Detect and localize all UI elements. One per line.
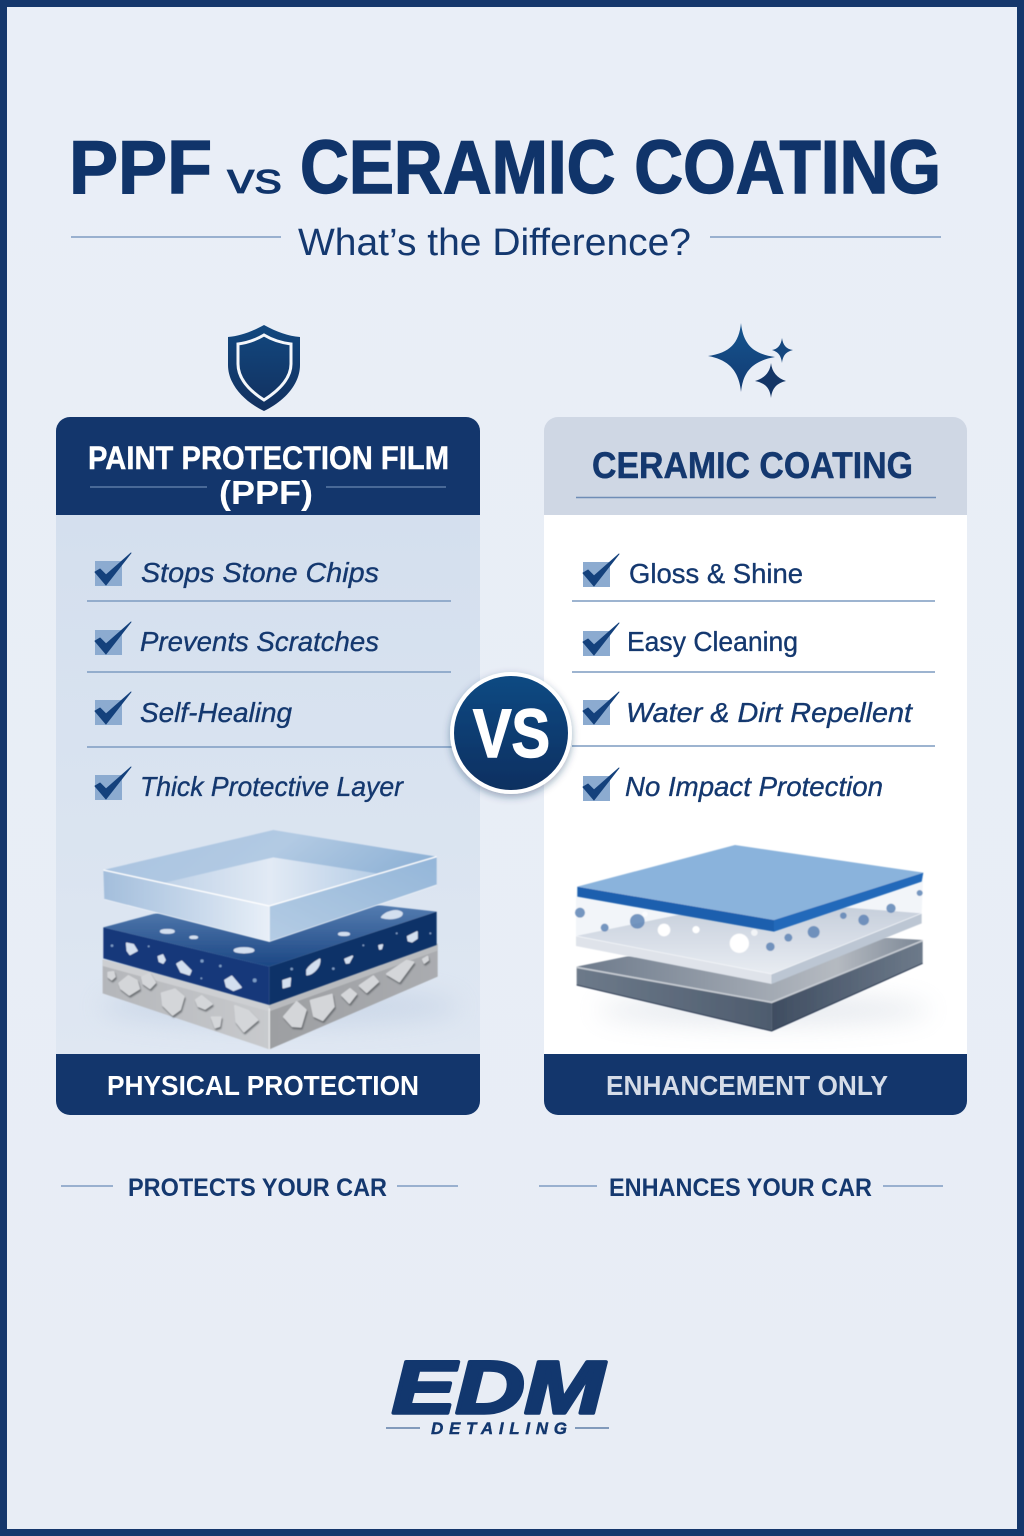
stone base layer	[103, 943, 438, 1049]
header title: PAINT PROTECTION FILM	[88, 440, 449, 476]
illustration: PPF layers	[100, 830, 460, 1049]
item: no impact protection: No Impact Protection	[625, 771, 883, 802]
item: thick protective layer: Thick Protective Layer	[140, 771, 405, 802]
panel body	[56, 515, 480, 1055]
caption: protects your car: PROTECTS YOUR CAR	[128, 1174, 387, 1202]
dividers: right list	[572, 601, 935, 746]
item: easy cleaning: Easy Cleaning	[627, 626, 798, 657]
transparent film layer	[103, 830, 437, 942]
panel: ceramic coating	[544, 417, 967, 1115]
title: CERAMIC COATING	[300, 125, 941, 209]
subtitle with rules: What’s the Difference?	[298, 222, 691, 264]
panel footer	[544, 1054, 967, 1115]
VS badge	[452, 674, 570, 792]
blue layer	[103, 893, 437, 1005]
dark paint base	[577, 930, 923, 1031]
logo: EDM Detailing	[386, 1346, 609, 1438]
item: self-healing: Self-Healing	[140, 697, 292, 728]
item: prevents scratches: Prevents Scratches	[140, 626, 379, 657]
item: water and dirt repellent: Water & Dirt Repellent	[626, 697, 913, 728]
caption: enhances your car: ENHANCES YOUR CAR	[609, 1174, 872, 1202]
panel footer	[56, 1054, 480, 1115]
blue coating layer	[577, 845, 923, 932]
list: ceramic coating features	[583, 554, 913, 802]
translucent bubble layer	[575, 873, 923, 984]
title	[69, 125, 941, 209]
logo: EDM Detailing: EDM	[392, 1346, 606, 1429]
dividers: left list	[87, 601, 460, 747]
list: PPF features	[95, 553, 405, 802]
illustration: ceramic layers	[575, 845, 930, 1031]
footer label: ENHANCEMENT ONLY	[606, 1070, 888, 1101]
header title: CERAMIC COATING	[592, 445, 913, 486]
icon: sparkles	[708, 323, 793, 398]
footer label: PHYSICAL PROTECTION	[107, 1070, 419, 1101]
panel header	[544, 417, 967, 515]
item: gloss and shine	[583, 554, 803, 589]
logo: EDM Detailing: DETAILING	[431, 1419, 567, 1438]
VS badge: VS	[473, 695, 550, 772]
item: self-healing	[95, 692, 292, 728]
panel: paint protection film	[56, 417, 480, 1115]
item: stops stone chips: Stops Stone Chips	[141, 557, 379, 588]
panel body	[544, 515, 967, 1055]
panel header	[56, 417, 480, 515]
item: easy cleaning	[583, 623, 798, 657]
title: PPF	[69, 125, 212, 209]
title: vs	[227, 154, 282, 203]
header title second line: (PPF)	[219, 474, 313, 511]
icon: shield	[228, 325, 300, 411]
item: gloss and shine: Gloss & Shine	[629, 558, 803, 589]
